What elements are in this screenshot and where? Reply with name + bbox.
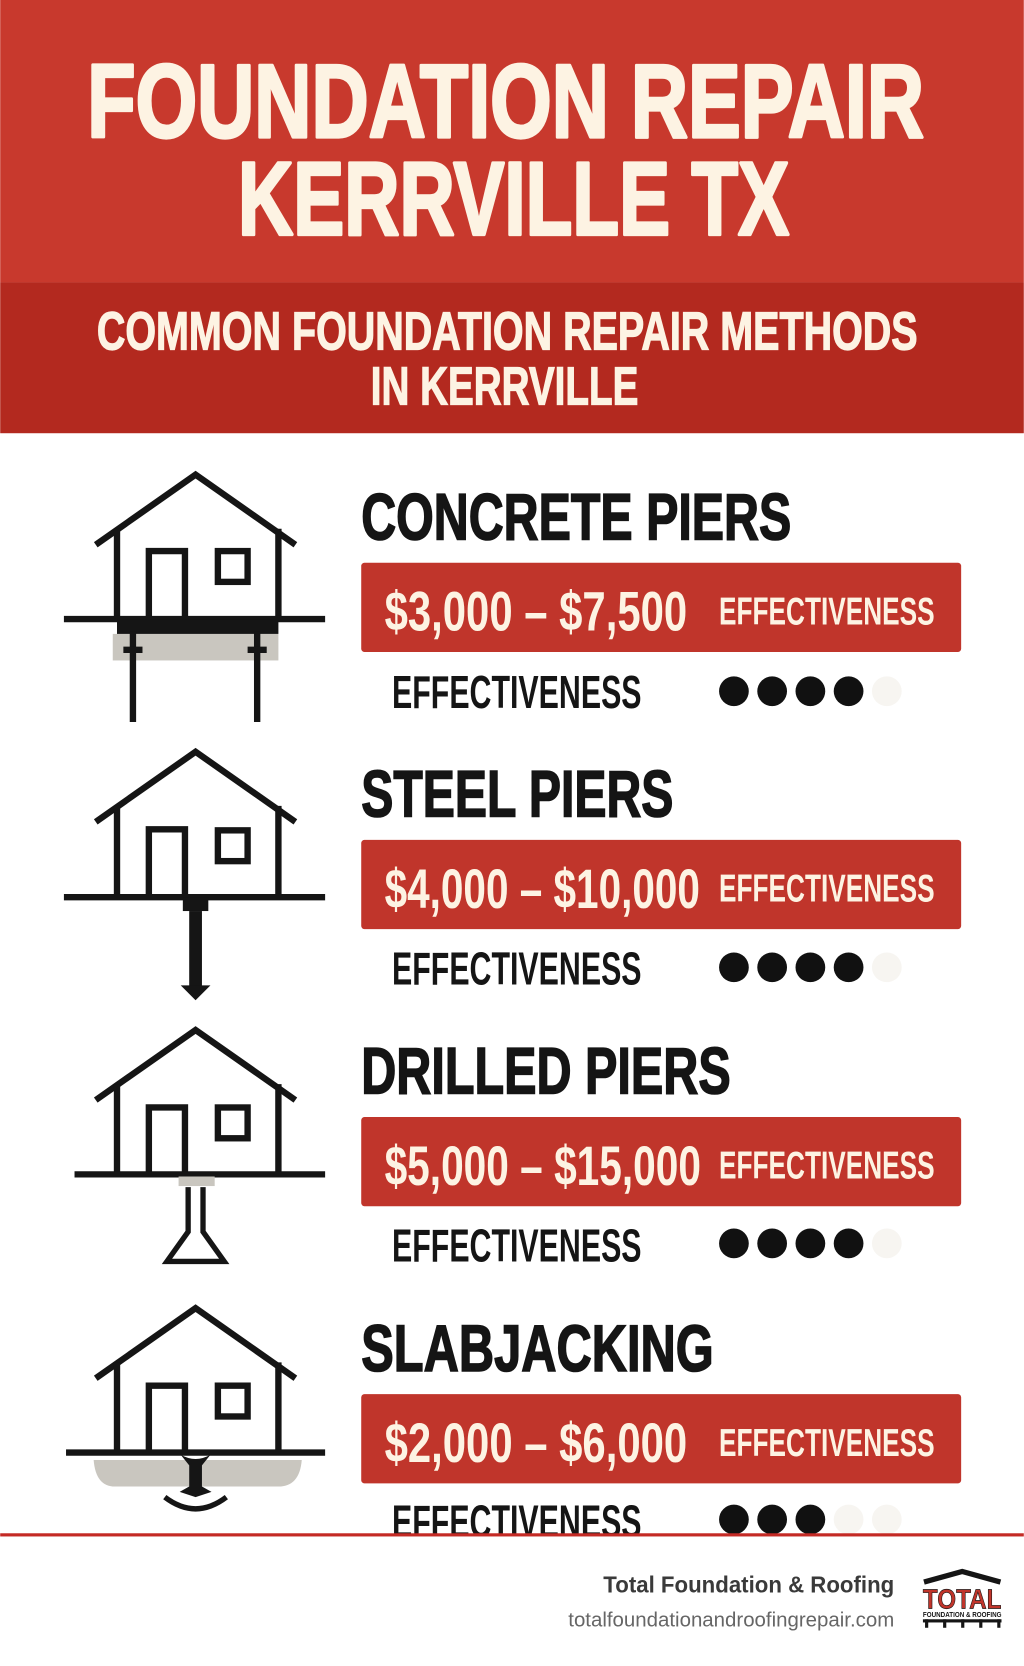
row: slabjacking	[66, 1308, 961, 1548]
effectiveness rating: EFFECTIVENESS	[392, 666, 642, 718]
header band	[0, 0, 1024, 433]
price box	[361, 840, 961, 929]
price box	[361, 563, 961, 652]
footer divider	[0, 1534, 1024, 1666]
heading: DRILLED PIERS	[361, 1034, 731, 1108]
logo	[923, 1571, 1002, 1628]
logo: FOUNDATION & ROOFING	[923, 1610, 1002, 1619]
title: KERRVILLE TX	[238, 142, 789, 258]
row: drilled piers	[75, 1030, 961, 1271]
price box: $4,000 – $10,000	[385, 858, 700, 920]
effectiveness rating: EFFECTIVENESS	[392, 942, 642, 994]
price box: $2,000 – $6,000	[385, 1412, 687, 1474]
icon: house on steel pier	[64, 752, 325, 1000]
title	[87, 44, 924, 258]
subtitle: IN KERRVILLE	[371, 357, 638, 417]
row: steel piers	[64, 752, 961, 1000]
heading: SLABJACKING	[361, 1311, 714, 1385]
heading: CONCRETE PIERS	[361, 479, 791, 553]
footer company name	[568, 1572, 894, 1632]
icon: house on concrete piers	[64, 475, 325, 722]
effectiveness rating: EFFECTIVENESS	[392, 1219, 642, 1271]
heading: STEEL PIERS	[361, 757, 673, 831]
footer company name: Total Foundation & Roofing	[603, 1572, 894, 1598]
logo: TOTAL	[923, 1584, 1002, 1615]
row: concrete piers	[64, 475, 961, 722]
icon: house on drilled pier	[75, 1030, 325, 1261]
subtitle	[97, 301, 918, 417]
price box: $3,000 – $7,500	[385, 581, 687, 643]
price box	[361, 1117, 961, 1206]
footer company name: totalfoundationandroofingrepair.com	[568, 1610, 894, 1632]
icon: house with slabjacking	[66, 1308, 325, 1509]
price box: $5,000 – $15,000	[385, 1135, 701, 1197]
effectiveness rating: EFFECTIVENESS	[392, 1496, 642, 1548]
price box	[361, 1394, 961, 1483]
